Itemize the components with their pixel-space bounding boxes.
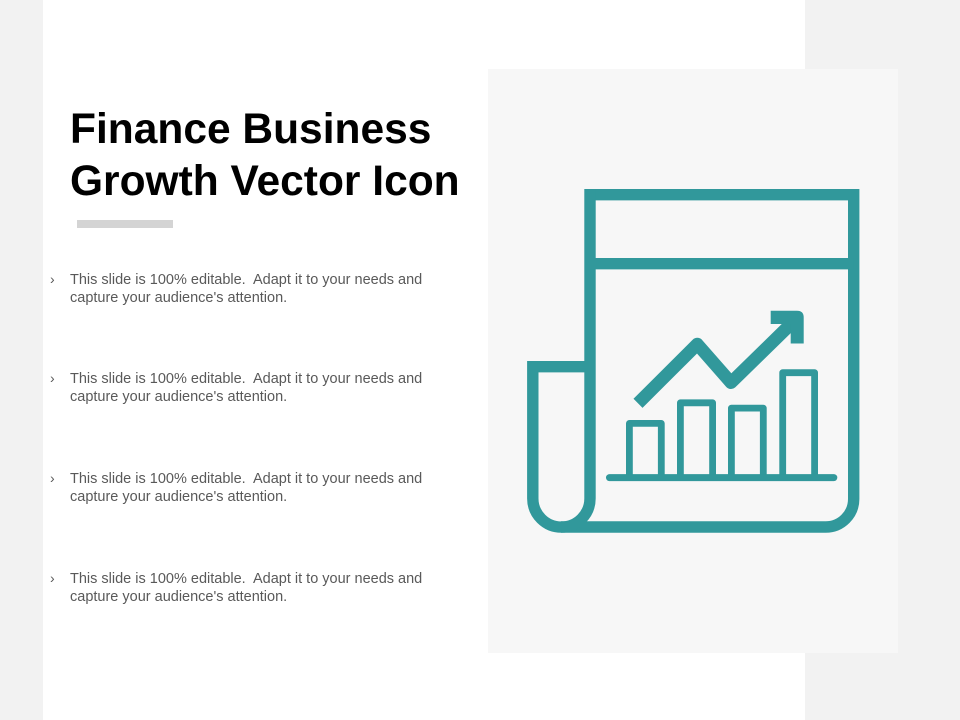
bullet item 1: ›	[50, 271, 55, 287]
panel: icon background	[488, 69, 898, 653]
bullet item 3: ›	[50, 470, 55, 486]
title: Finance Business	[70, 106, 431, 153]
title	[70, 106, 460, 205]
icon: bar chart	[610, 373, 834, 478]
title underline bar	[77, 220, 173, 228]
bullet item 4: ›	[50, 570, 55, 586]
icon: growth arrow	[638, 311, 804, 403]
white slide area	[43, 0, 805, 720]
bullet item 2: ›	[50, 370, 55, 386]
icon: scroll outline	[533, 189, 854, 527]
bullet item 1: This slide is 100% editable. Adapt it to your needs and capture your audience's attention.	[70, 272, 422, 306]
bullet item 3: This slide is 100% editable. Adapt it to your needs and capture your audience's attention.	[70, 471, 422, 505]
bullet item 2: This slide is 100% editable. Adapt it to your needs and capture your audience's attention.	[70, 371, 422, 405]
title: Growth Vector Icon	[70, 158, 460, 205]
bullet item 4: This slide is 100% editable. Adapt it to your needs and capture your audience's attention.	[70, 571, 422, 605]
